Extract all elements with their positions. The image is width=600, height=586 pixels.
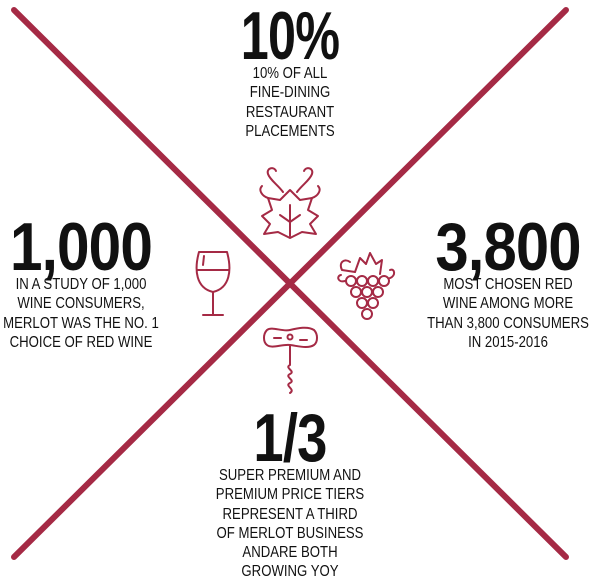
stat: top 10% xyxy=(241,0,339,140)
stat: bottom 1/3: 1/3 xyxy=(253,400,327,476)
stat: bottom 1/3 xyxy=(216,400,364,580)
stat: top 10%: PLACEMENTS xyxy=(245,123,335,140)
stat: bottom 1/3: OF MERLOT BUSINESS xyxy=(217,525,363,542)
stat: left 1,000: CHOICE OF RED WINE xyxy=(10,334,152,351)
stat: top 10%: FINE-DINING xyxy=(250,84,330,101)
stat: bottom 1/3: REPRESENT A THIRD xyxy=(223,506,357,523)
stat: left 1,000: 1,000 xyxy=(10,209,152,285)
stat: right 3,800 xyxy=(427,209,589,351)
stat: right 3,800: THAN 3,800 CONSUMERS xyxy=(427,315,589,332)
stat: left 1,000: IN A STUDY OF 1,000 xyxy=(16,276,146,293)
icon: wine glass xyxy=(197,252,229,315)
stat: right 3,800: MOST CHOSEN RED xyxy=(443,276,573,293)
stat: right 3,800: WINE AMONG MORE xyxy=(443,295,573,312)
stat: bottom 1/3: GROWING YOY xyxy=(241,563,339,580)
stat: left 1,000: WINE CONSUMERS, xyxy=(17,295,145,312)
stat: top 10%: RESTAURANT xyxy=(246,104,334,121)
stat: bottom 1/3: SUPER PREMIUM AND xyxy=(219,467,361,484)
stat: bottom 1/3: PREMIUM PRICE TIERS xyxy=(216,486,364,503)
stat: left 1,000 xyxy=(3,209,159,351)
stat: right 3,800: IN 2015-2016 xyxy=(468,334,548,351)
icon: grapes xyxy=(338,253,394,319)
stat: left 1,000: MERLOT WAS THE NO. 1 xyxy=(3,315,159,332)
stat: top 10%: 10% OF ALL xyxy=(253,65,327,82)
icon: corkscrew xyxy=(264,328,317,393)
stat: top 10%: 10% xyxy=(241,0,339,74)
stat: right 3,800: 3,800 xyxy=(435,209,581,285)
stat: bottom 1/3: ANDARE BOTH xyxy=(242,544,338,561)
